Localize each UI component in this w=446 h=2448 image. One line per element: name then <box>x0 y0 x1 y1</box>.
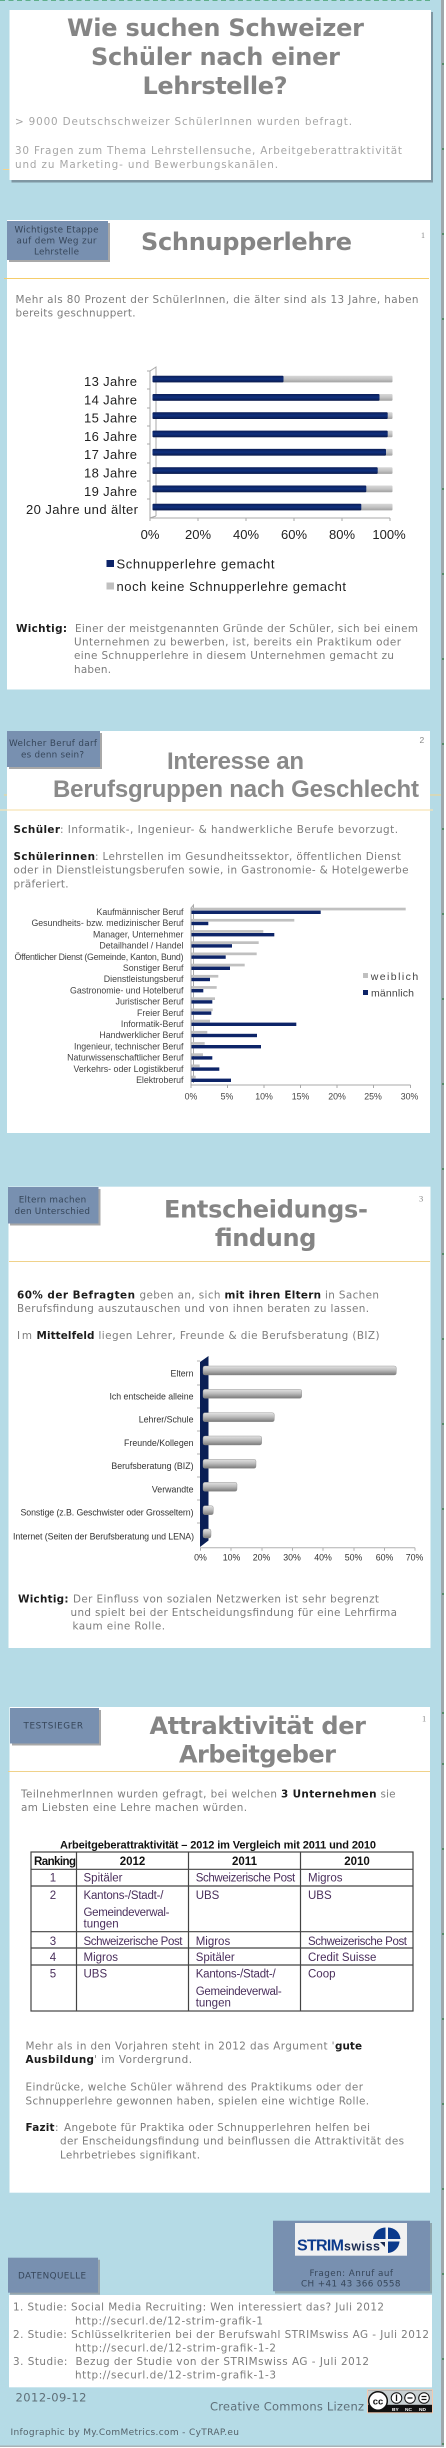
note: Wichtig: und spielt bei der Entscheidungsfindung für eine Lehrfirma <box>70 1607 397 1619</box>
table: employer ranking: 2011 <box>232 1856 258 1868</box>
body text: Mittelfeld <box>36 1330 94 1342</box>
category labels: 15 Jahre <box>84 411 137 426</box>
table: employer ranking: tungen <box>196 1998 231 2010</box>
intro text <box>15 116 402 171</box>
page number: 1 <box>421 231 425 240</box>
label: Welcher Beruf: Welcher Beruf darf <box>9 739 98 749</box>
note: Wichtig: eine Schnupperlehre in diesem Unternehmen gemacht zu <box>74 650 394 662</box>
panel: data sources <box>9 2295 432 2387</box>
title: Wie suchen Schweizer <box>67 14 364 42</box>
label: Welcher Beruf: es denn sein? <box>21 751 84 761</box>
logo: STRIMswiss: STRIM <box>297 2238 344 2255</box>
note: Wichtig: kaum eine Rolle. <box>72 1621 165 1633</box>
label: Wichtigste Etappe: Lehrstelle <box>34 248 79 258</box>
category labels: Verkehrs- oder Logistikberuf <box>73 1064 184 1074</box>
axis labels: 50% <box>345 1553 362 1563</box>
contact text: Fragen: Anruf auf <box>310 2269 394 2279</box>
axis labels <box>141 527 406 542</box>
table: employer ranking: UBS <box>84 1969 107 1981</box>
body text: oder in Dienstleistungsberufen sowie, in Gastronomie- & Hotelgewerbe <box>14 865 408 877</box>
panel: data sources: 2. Studie: Schlüsselkriterien bei der Berufswahl STRIMswiss AG - Juli 2012 <box>13 2329 429 2341</box>
axis labels <box>185 1091 418 1101</box>
male bars <box>192 911 321 1082</box>
axis labels: 10% <box>223 1553 240 1563</box>
female bars <box>192 908 406 1078</box>
axis labels: 40% <box>314 1553 332 1563</box>
closing text <box>26 2040 404 2161</box>
table: employer ranking: Schweizerische Post <box>84 1936 183 1948</box>
category labels: Naturwissenschaftlicher Beruf <box>67 1053 184 1063</box>
table: employer ranking: Kantons-/Stadt-/ <box>84 1890 164 1902</box>
note: Wichtig: Der Einfluss von sozialen Netzwerken ist sehr begrenzt <box>73 1593 379 1605</box>
label: Testsieger <box>10 1708 101 1746</box>
category labels: Kaufmännischer Beruf <box>96 907 184 917</box>
intro text: > 9000 Deutschschweizer SchülerInnen wurden befragt. <box>15 116 352 128</box>
label: Wichtigste Etappe: Wichtigste Etappe <box>14 226 98 236</box>
body text: sie <box>380 1788 396 1800</box>
table: employer ranking: 4 <box>50 1952 57 1964</box>
legend: weiblich <box>370 971 418 983</box>
body text: mit ihren Eltern <box>224 1289 321 1301</box>
legend: Schnupperlehre gemacht <box>116 556 275 572</box>
closing text: gute <box>335 2040 362 2052</box>
axis labels: 10% <box>255 1091 273 1101</box>
body text: am Liebsten eine Lehre machen würden. <box>21 1802 247 1814</box>
category labels: Freunde/Kollegen <box>124 1438 194 1448</box>
category labels: 16 Jahre <box>84 429 137 444</box>
icon: CC BY-NC-ND badge: cc <box>373 2396 383 2408</box>
panel: data sources: http://securl.de/12-strim-grafik-1-2 <box>75 2342 276 2354</box>
axis labels: 30% <box>401 1091 418 1101</box>
note: Wichtig <box>18 1593 397 1633</box>
category labels: Dienstleistungsberuf <box>104 974 184 984</box>
body text: : Informatik-, Ingenieur- & handwerkliche Berufe bevorzugt. <box>60 824 398 836</box>
table: employer ranking: Migros <box>308 1873 343 1885</box>
closing text: ' im Vordergrund. <box>94 2054 192 2066</box>
table: employer ranking: UBS <box>196 1890 220 1902</box>
category labels: 18 Jahre <box>84 466 137 480</box>
body text <box>17 1289 380 1342</box>
table: employer ranking: 2010 <box>344 1856 370 1868</box>
closing text: Mehr als in den Vorjahren steht in 2012 das Argument ' <box>26 2040 334 2052</box>
legend: männlich <box>371 987 414 999</box>
table: employer ranking: 5 <box>50 1969 56 1981</box>
label: Datenquelle: DATENQUELLE <box>18 2271 86 2281</box>
table: employer ranking: Ranking <box>34 1856 76 1868</box>
note: Wichtig: Wichtig: <box>18 1593 68 1605</box>
icon: CC BY-NC-ND badge: ND <box>419 2407 426 2413</box>
category labels: Ich entscheide alleine <box>110 1392 194 1402</box>
body text: 60% der Befragten <box>17 1289 135 1301</box>
axis labels: 70% <box>406 1553 423 1563</box>
category labels <box>14 907 184 1085</box>
heading <box>150 1712 366 1769</box>
panel: Entscheidungsfindung <box>8 1187 430 1648</box>
label: Testsieger: TESTSIEGER <box>22 1722 83 1732</box>
credit: Infographic by My.ComMetrics.com - CyTRAP.eu <box>10 2428 239 2438</box>
category labels: Manager, Unternehmer <box>93 929 184 939</box>
legend: noch keine Schnupperlehre gemacht <box>116 579 346 594</box>
intro text: und zu Marketing- und Bewerbungskanälen. <box>15 159 278 171</box>
logo: STRIMswiss: swiss <box>344 2240 380 2254</box>
category labels: Berufsberatung (BIZ) <box>111 1461 194 1471</box>
panel: data sources: http://securl.de/12-strim-grafik-1 <box>75 2315 263 2327</box>
label: Eltern machen: den Unterschied <box>14 1207 90 1217</box>
closing text: : <box>55 2122 59 2134</box>
axis labels: 80% <box>329 527 355 542</box>
category labels: Internet (Seiten der Berufsberatung und LENA) <box>13 1532 194 1542</box>
body text: präferiert. <box>14 878 68 890</box>
stacked bar chart: age <box>26 367 406 594</box>
heading <box>53 748 419 803</box>
page number: 1 <box>422 1714 426 1724</box>
table: employer ranking: 1 <box>50 1873 56 1885</box>
panel: data sources: 1. Studie: Social Media Recruiting: Wen interessiert das? Juli 2012 <box>13 2302 384 2314</box>
category labels: Sonstiger Beruf <box>123 963 184 973</box>
table: employer ranking: 2 <box>50 1890 56 1902</box>
category labels: Handwerklicher Beruf <box>99 1030 184 1040</box>
category labels: Informatik-Beruf <box>121 1019 184 1029</box>
table: employer ranking: Gemeindeverwal- <box>84 1907 170 1919</box>
category labels: Öffentlicher Dienst (Gemeinde, Kanton, Bund) <box>14 952 184 962</box>
axis labels: 30% <box>283 1553 301 1563</box>
axis labels <box>194 1553 423 1563</box>
heading <box>164 1195 368 1252</box>
note: Wichtig: haben. <box>74 664 111 676</box>
label: Wichtigste Etappe: auf dem Weg zur <box>16 236 97 246</box>
heading: Entscheidungs- <box>164 1195 368 1223</box>
category labels: Sonstige (z.B. Geschwister oder Grosseltern) <box>20 1508 194 1518</box>
panel: Interesse an Berufsgruppen <box>0 731 433 1133</box>
body text: Berufsfindung auszutauschen und von ihnen beraten zu lassen. <box>17 1303 369 1315</box>
axis labels: 100% <box>372 527 406 542</box>
label: Welcher Beruf <box>7 731 102 769</box>
heading: Arbeitgeber <box>179 1741 336 1769</box>
date: 2012-09-12 <box>16 2391 86 2405</box>
axis labels: 20% <box>253 1553 270 1563</box>
body text <box>16 294 418 320</box>
axis labels: 25% <box>364 1091 382 1101</box>
axis labels: 60% <box>376 1553 393 1563</box>
legend <box>363 971 418 999</box>
heading: Attraktivität der <box>150 1712 366 1740</box>
heading: Interesse an <box>167 748 304 775</box>
body text: bereits geschnuppert. <box>16 308 136 320</box>
panel: title and intro <box>10 10 433 182</box>
table: employer ranking <box>31 1839 413 2011</box>
panel: data sources: http://securl.de/12-strim-grafik-1-3 <box>75 2370 276 2382</box>
body text: liegen Lehrer, Freunde & die Berufsberatung (BIZ) <box>98 1330 380 1342</box>
category labels: Ingenieur, technischer Beruf <box>74 1041 184 1051</box>
axis labels: 60% <box>281 527 307 542</box>
body text: Schülerinnen <box>14 851 95 863</box>
table: employer ranking: 2012 <box>120 1856 145 1868</box>
bars <box>152 376 392 510</box>
note: Wichtig <box>16 623 418 676</box>
category labels: Verwandte <box>152 1484 194 1494</box>
category labels: 20 Jahre und älter <box>26 502 139 517</box>
axis labels: 15% <box>292 1091 309 1101</box>
heading: Berufsgruppen nach Geschlecht <box>53 776 419 803</box>
table: employer ranking: Migros <box>196 1936 230 1948</box>
category labels: Eltern <box>171 1368 194 1378</box>
axis labels: 40% <box>233 527 259 542</box>
category labels: 14 Jahre <box>84 392 137 407</box>
bars <box>203 1366 396 1538</box>
body text: Im <box>17 1330 32 1342</box>
title: Lehrstelle? <box>142 72 288 100</box>
category labels: Gesundheits- bzw. medizinischer Beruf <box>31 918 184 928</box>
note: Wichtig: Einer der meistgenannten Gründe der Schüler, sich bei einem <box>75 623 418 635</box>
title <box>67 14 364 100</box>
bar chart: occupations by gender <box>14 905 418 1101</box>
category labels: 17 Jahre <box>84 447 137 462</box>
panel: data sources: 3. Studie: Bezug der Studie von der STRIMswiss AG - Juli 2012 <box>13 2356 369 2368</box>
category labels: 13 Jahre <box>84 374 137 389</box>
category labels: Detailhandel / Handel <box>99 941 184 951</box>
closing text: Fazit <box>26 2122 55 2134</box>
contact text: CH +41 43 366 0558 <box>301 2280 400 2290</box>
table: employer ranking: Spitäler <box>84 1873 123 1885</box>
icon: CC BY-NC-ND badge <box>367 2389 433 2413</box>
body text: : Lehrstellen im Gesundheitssektor, öffentlichen Dienst <box>95 851 401 863</box>
table: employer ranking: Schweizerische Post <box>196 1873 296 1885</box>
note: Wichtig: Unternehmen zu bewerben, ist, bereits ein Praktikum oder <box>74 636 402 648</box>
table: employer ranking: Arbeitgeberattraktivität – 2012 im Vergleich mit 2011 und 2010 <box>60 1839 376 1851</box>
category labels: Juristischer Beruf <box>116 997 184 1007</box>
table: employer ranking: Coop <box>308 1969 336 1981</box>
body text <box>20 1788 396 1814</box>
category labels: Lehrer/Schule <box>139 1415 194 1425</box>
legend <box>106 556 346 594</box>
closing text: Angebote für Praktika oder Schnupperlehren helfen bei <box>64 2122 370 2134</box>
panel: Schnupperlehre <box>4 220 430 690</box>
label: Eltern machen <box>8 1187 100 1226</box>
category labels: Freier Beruf <box>137 1008 184 1018</box>
closing text: Schnupperlehre gewonnen haben, spielen eine wichtige Rolle. <box>26 2095 369 2107</box>
table: employer ranking: Schweizerische Post <box>308 1936 408 1948</box>
note: Wichtig: Wichtig: <box>16 623 67 635</box>
bar chart: advice sources <box>13 1356 423 1563</box>
axis labels: 0% <box>194 1553 207 1563</box>
axis labels: 0% <box>141 527 160 542</box>
panel: STRIMswiss contact <box>273 2221 432 2294</box>
axis labels: 20% <box>185 527 211 542</box>
table: employer ranking: Migros <box>84 1952 118 1964</box>
body text: Mehr als 80 Prozent der SchülerInnen, die älter sind als 13 Jahre, haben <box>16 294 418 306</box>
category labels <box>13 1368 194 1542</box>
title: Schüler nach einer <box>91 43 340 71</box>
intro text: 30 Fragen zum Thema Lehrstellensuche, Arbeitgeberattraktivität <box>15 145 402 157</box>
heading: Schnupperlehre <box>141 228 352 256</box>
logo: STRIMswiss <box>295 2223 407 2256</box>
closing text: Lehrbetriebes signifikant. <box>60 2149 200 2161</box>
page number: 3 <box>419 1194 423 1204</box>
body text: 3 Unternehmen <box>281 1788 376 1800</box>
heading: findung <box>215 1224 316 1252</box>
table: employer ranking: Credit Suisse <box>308 1952 376 1964</box>
closing text: Ausbildung <box>26 2054 94 2066</box>
icon: CC BY-NC-ND badge: BY <box>392 2407 399 2413</box>
closing text: Eindrücke, welche Schüler während des Praktikums oder der <box>26 2082 364 2094</box>
contact text <box>301 2269 400 2290</box>
panel: Attraktivität der Arbeitgeber <box>8 1707 430 2193</box>
category labels: 19 Jahre <box>84 484 137 499</box>
axis labels: 5% <box>221 1091 234 1101</box>
category labels <box>26 374 139 517</box>
category labels: Gastronomie- und Hotelberuf <box>70 985 184 995</box>
icon: CC BY-NC-ND badge: NC <box>405 2407 412 2413</box>
table: employer ranking: Gemeindeverwal- <box>196 1986 282 1998</box>
label: Eltern machen: Eltern machen <box>19 1196 86 1206</box>
label: Wichtigste Etappe <box>7 221 110 262</box>
body text: in Sachen <box>325 1289 379 1301</box>
body text <box>14 824 408 890</box>
table: employer ranking: tungen <box>84 1919 119 1931</box>
body text: Schüler <box>14 824 61 836</box>
closing text: der Enscheidungsfindung und beinflussen die Attraktivität des <box>60 2136 404 2148</box>
axis labels: 0% <box>185 1091 198 1101</box>
body text: TeilnehmerInnen wurden gefragt, bei welchen <box>20 1788 277 1800</box>
licence text: Creative Commons Lizenz <box>210 2400 364 2414</box>
body text: geben an, sich <box>140 1289 220 1301</box>
table: employer ranking: Spitäler <box>196 1952 235 1964</box>
label: Datenquelle <box>8 2258 100 2295</box>
table: employer ranking: Kantons-/Stadt-/ <box>196 1969 276 1981</box>
category labels: Elektroberuf <box>136 1075 184 1085</box>
table: employer ranking: 3 <box>50 1936 56 1948</box>
table: employer ranking: UBS <box>308 1890 332 1902</box>
page number: 2 <box>420 735 424 745</box>
axis labels: 20% <box>328 1091 346 1101</box>
